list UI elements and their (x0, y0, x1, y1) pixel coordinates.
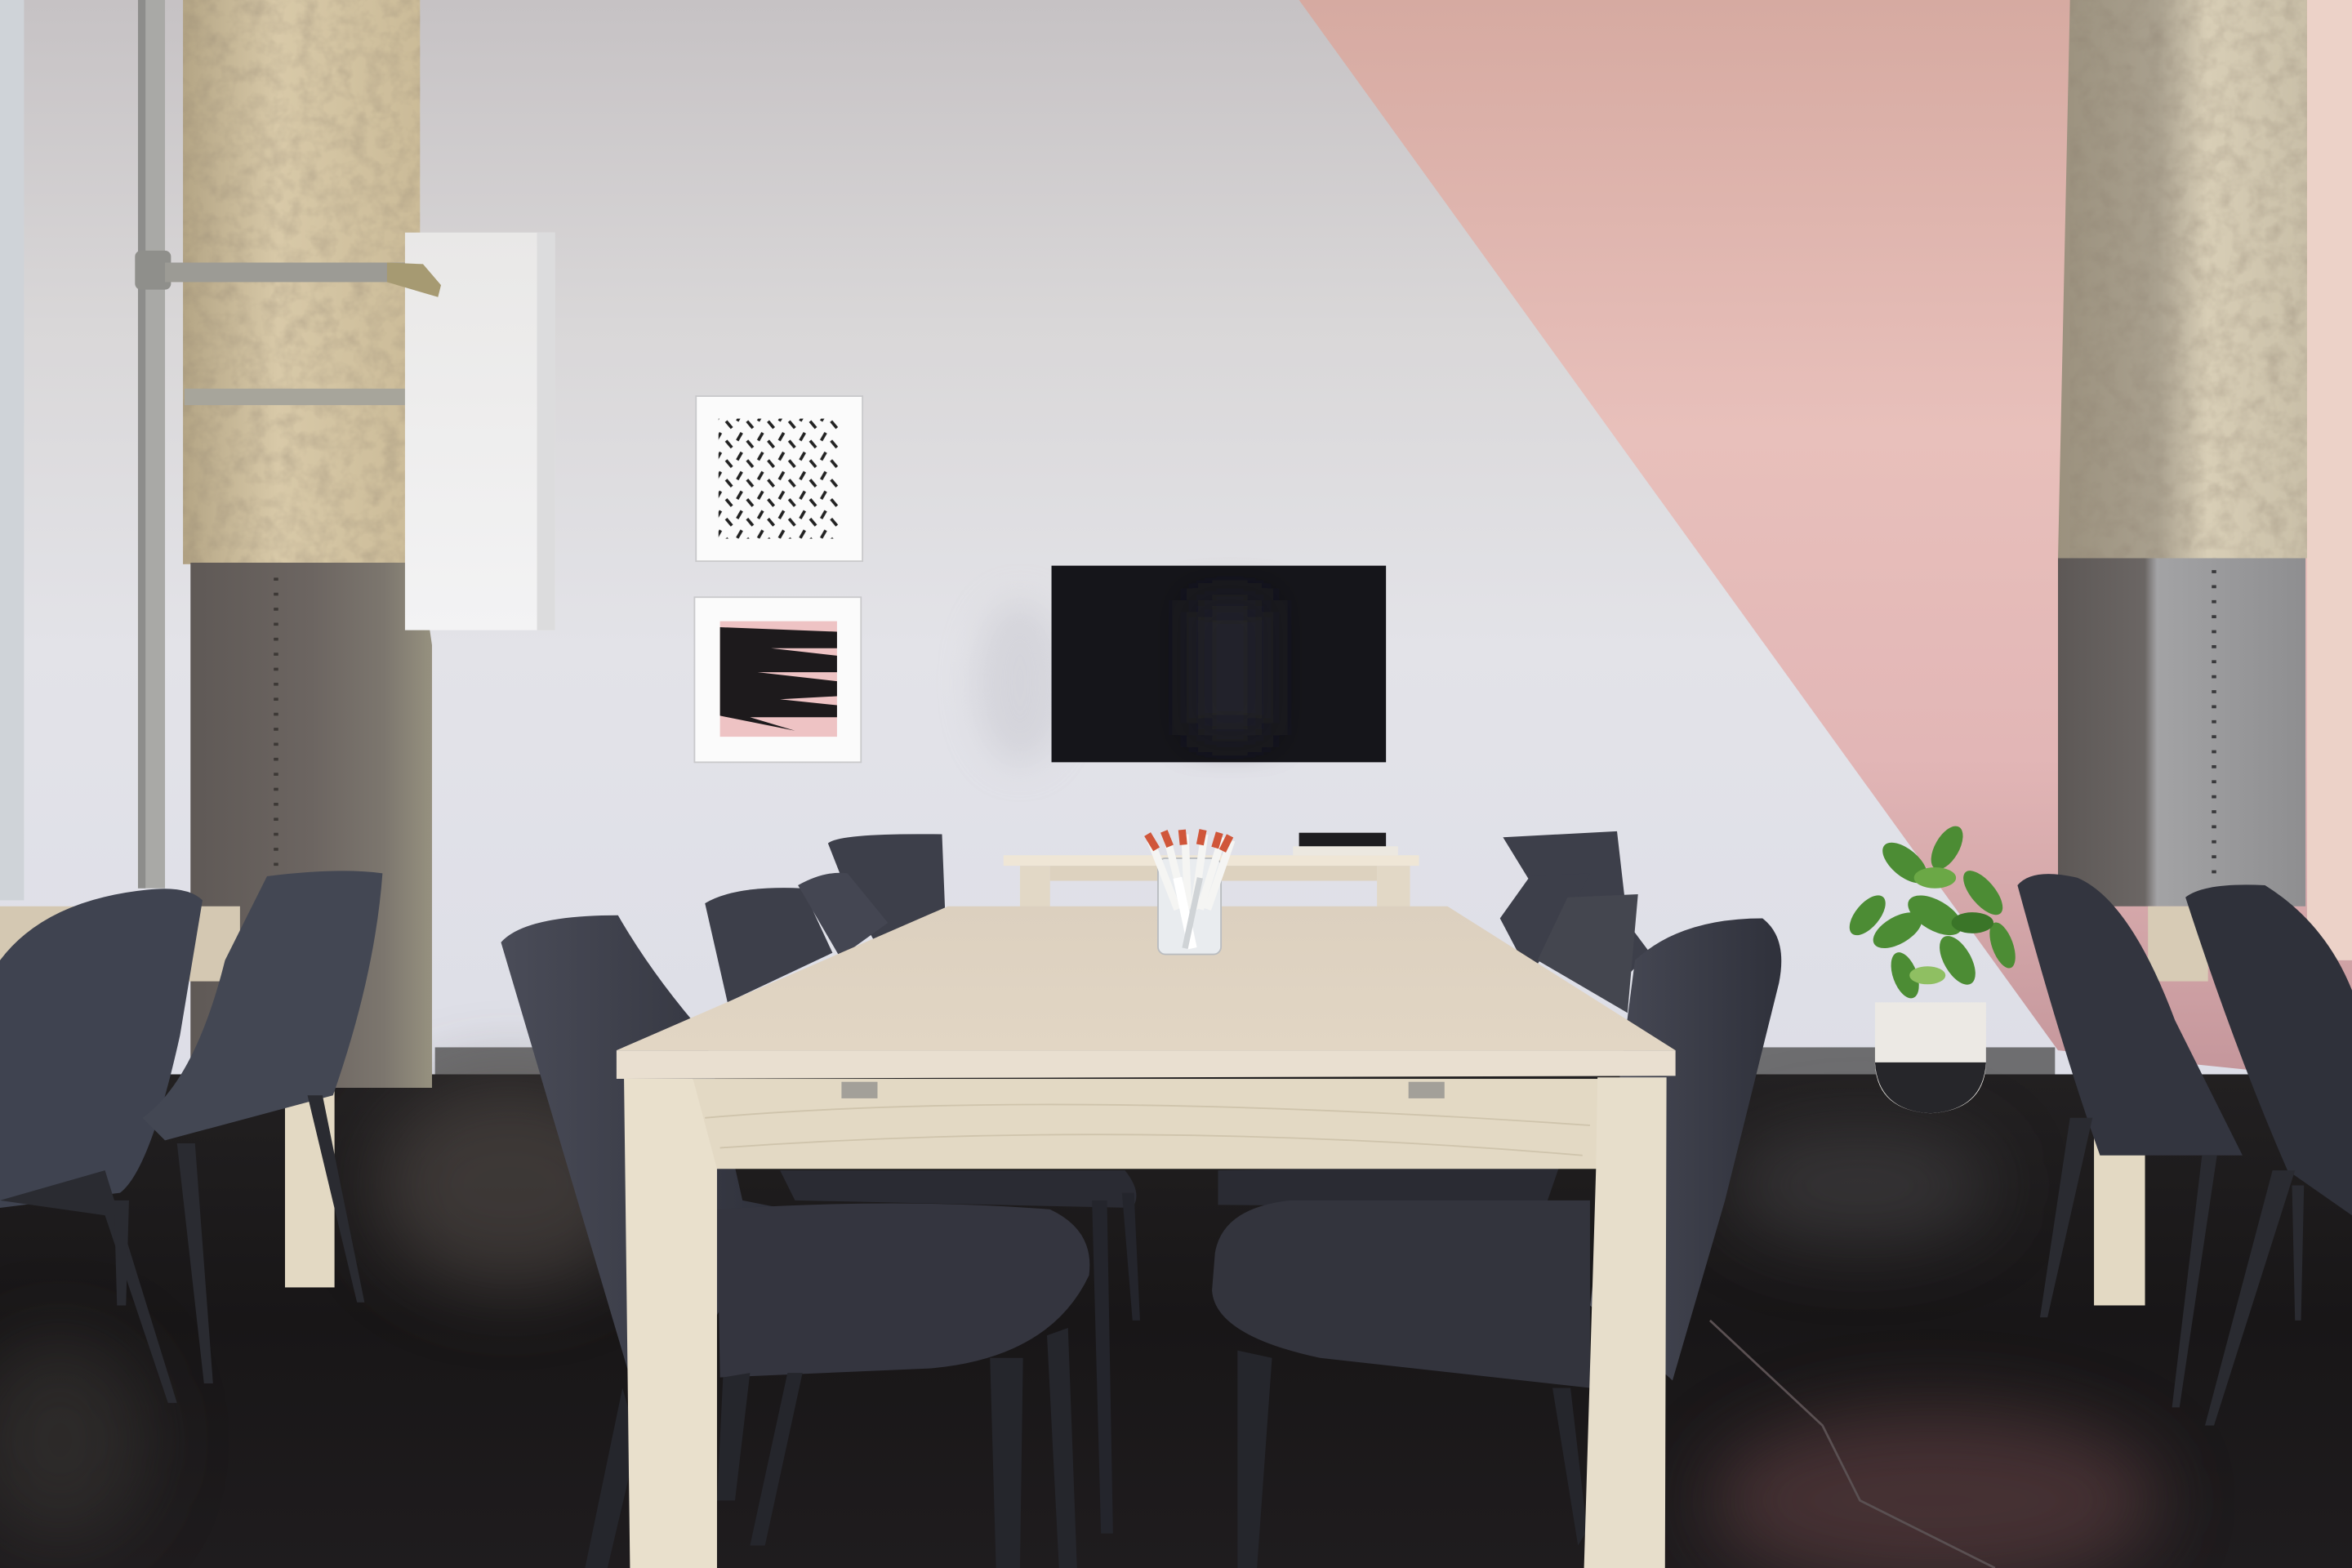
left window strip (0, 0, 24, 900)
skirting (435, 1047, 2055, 1077)
pencil jar (1147, 830, 1232, 955)
left chair A (0, 889, 203, 1208)
left table and chairs (0, 871, 382, 1403)
picture frame: pink spikes (694, 597, 861, 762)
white box (405, 233, 555, 630)
floor reflections (0, 1080, 2160, 1568)
wall shadow beside television (975, 600, 1065, 765)
left chair front (501, 915, 1089, 1568)
floor (0, 1075, 2352, 1568)
right chairs (2017, 874, 2352, 1425)
left column (183, 0, 432, 1088)
right leg (1584, 1077, 1667, 1568)
table top (617, 906, 1676, 1050)
console table (1004, 833, 1419, 908)
pipe elbow (387, 263, 441, 297)
television (1052, 566, 1386, 762)
pipe (135, 0, 423, 889)
right column (2058, 0, 2307, 906)
right chair front (1212, 918, 1781, 1568)
apron (693, 1079, 1599, 1169)
main table (617, 906, 1676, 1568)
rear seats (780, 1165, 1560, 1534)
right chair B (2185, 884, 2352, 1215)
pink wall diagonal (1299, 0, 2352, 1080)
right chair A (2017, 874, 2243, 1156)
plant (1843, 821, 2020, 1113)
picture frame: dots (696, 396, 862, 561)
back chairs (705, 831, 1650, 1013)
far right wall strip (2307, 0, 2352, 960)
wall (0, 0, 2352, 1080)
left chair B (142, 871, 382, 1140)
table front edge (617, 1050, 1676, 1079)
left leg (624, 1079, 717, 1568)
